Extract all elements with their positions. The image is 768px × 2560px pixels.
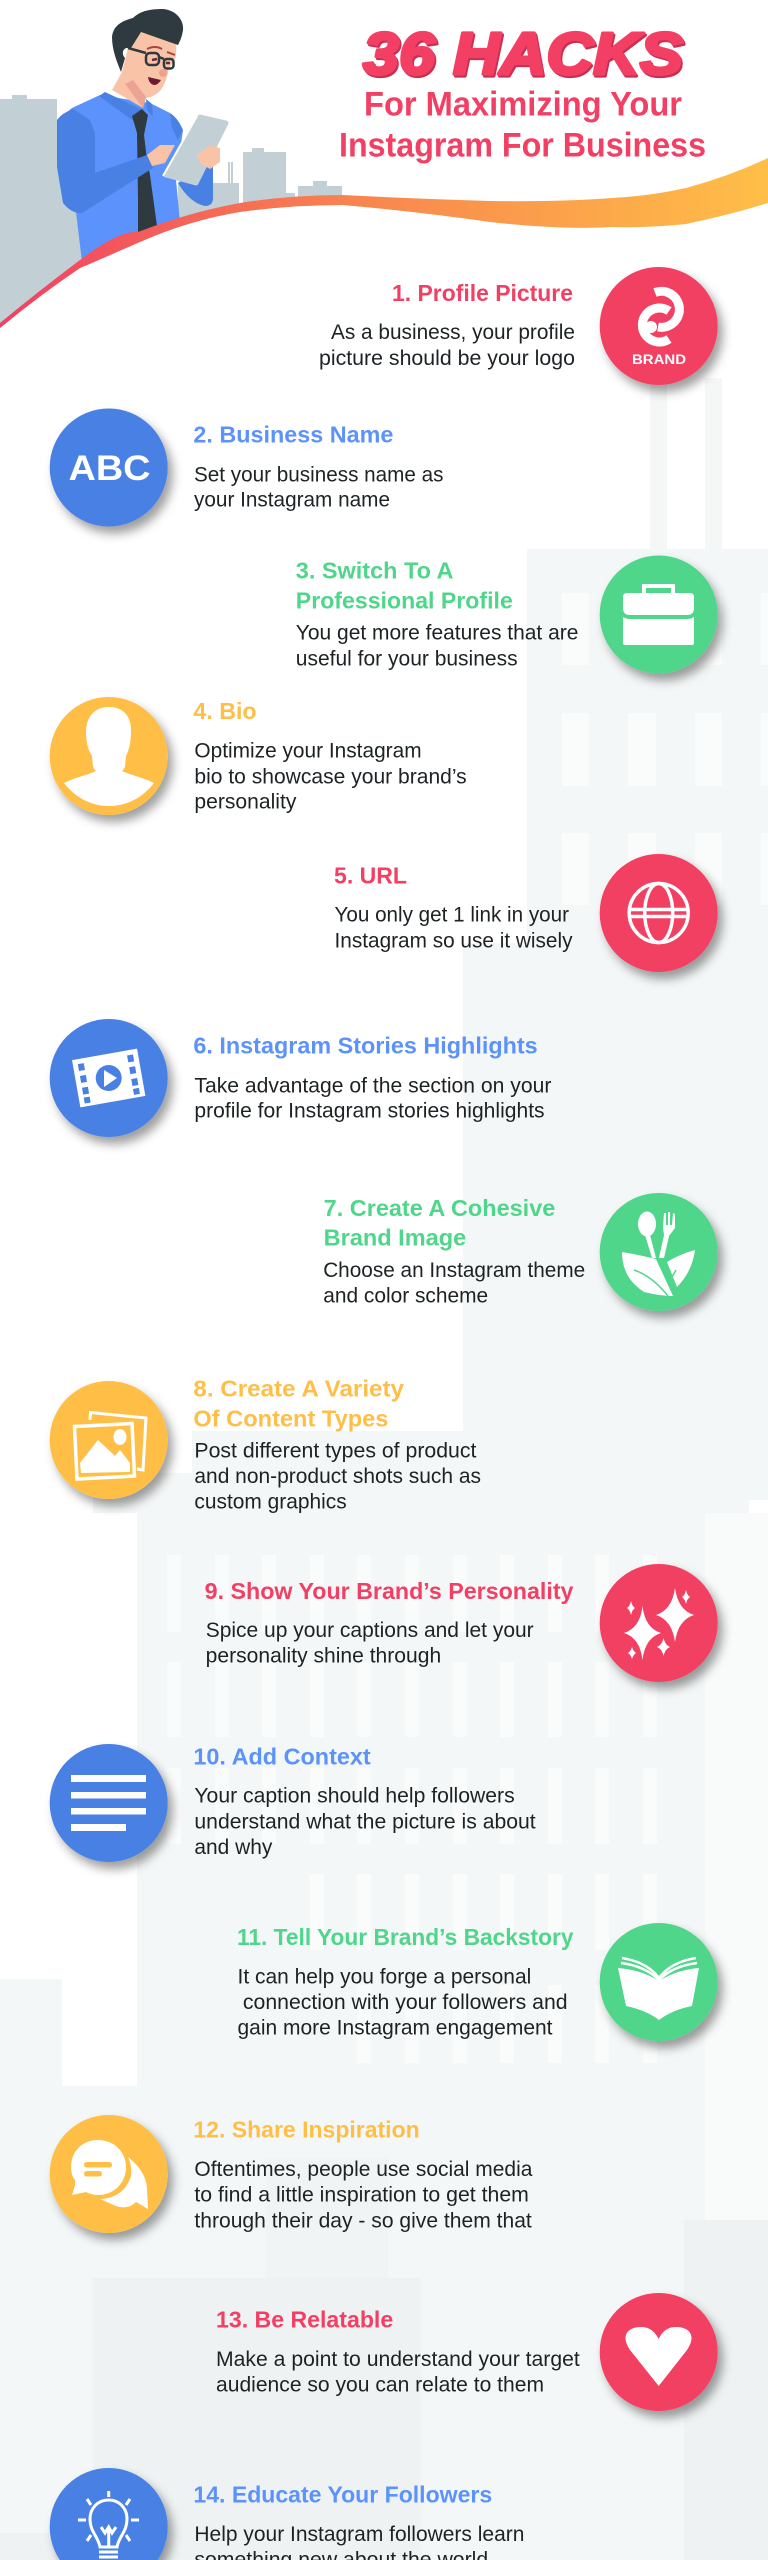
body: personality shine through	[206, 1645, 441, 1668]
body: picture should be your logo	[319, 347, 575, 370]
hack 1: profile picture	[319, 267, 718, 385]
body: profile for Instagram stories highlights	[194, 1100, 545, 1123]
body: Instagram so use it wisely	[334, 929, 573, 952]
heading: Of Content Types	[193, 1406, 388, 1432]
hack 6: stories highlights	[50, 1019, 551, 1137]
body: Make a point to understand your target	[216, 2348, 580, 2371]
body	[323, 1259, 585, 1308]
body: connection with your followers and	[243, 1991, 568, 2014]
left sleeve	[57, 109, 153, 213]
icon: text lines	[50, 1744, 168, 1862]
hack 7: cohesive brand image	[323, 1193, 718, 1311]
white area below wave	[0, 203, 768, 378]
subtitle	[339, 86, 706, 164]
subtitle: Instagram For Business	[339, 126, 706, 164]
body	[206, 1619, 534, 1668]
36 HACKS: 36 HACKS	[363, 21, 683, 87]
icon: film strip	[50, 1019, 168, 1137]
body: bio to showcase your brand’s	[194, 765, 467, 788]
body: As a business, your profile	[331, 321, 575, 344]
heading	[324, 1195, 555, 1251]
title	[339, 21, 706, 164]
eyebrows	[147, 47, 175, 55]
heading: 8. Create A Variety	[193, 1376, 404, 1402]
body: to find a little inspiration to get them	[194, 2184, 529, 2207]
body	[334, 904, 573, 952]
heading: 14. Educate Your Followers	[193, 2481, 492, 2507]
back arm	[170, 113, 213, 206]
body	[238, 1965, 568, 2040]
hack 2: business name	[50, 408, 443, 526]
hands	[147, 145, 220, 169]
body	[194, 1074, 551, 1123]
heading: Brand Image	[324, 1225, 466, 1251]
body: It can help you forge a personal	[238, 1965, 531, 1988]
body: Set your business name as	[194, 463, 444, 486]
hack 12: share inspiration	[50, 2115, 533, 2233]
body: useful for your business	[296, 647, 518, 670]
heading: 2. Business Name	[193, 422, 393, 448]
tablet rim	[163, 116, 197, 176]
body	[194, 1785, 536, 1859]
icon: open book	[600, 1923, 718, 2041]
body: Spice up your captions and let your	[206, 1619, 534, 1642]
hair	[112, 9, 183, 72]
heading: 13. Be Relatable	[216, 2307, 393, 2333]
glasses	[128, 48, 174, 68]
hack 9: brand personality	[205, 1564, 718, 1682]
heading: 11. Tell Your Brand’s Backstory	[237, 1924, 574, 1950]
body	[194, 1439, 481, 1514]
heading: 1. Profile Picture	[392, 280, 573, 306]
icon: brand logo: BRAND	[632, 351, 686, 367]
cheek	[159, 69, 167, 77]
icon: heart	[600, 2293, 718, 2411]
icon: chat bubbles	[50, 2115, 168, 2233]
heading: 7. Create A Cohesive	[324, 1195, 555, 1221]
body: audience so you can relate to them	[216, 2374, 544, 2397]
tie	[132, 109, 157, 232]
collar	[99, 92, 153, 120]
heading: 10. Add Context	[193, 1743, 371, 1769]
heading: Professional Profile	[296, 587, 513, 613]
body: and non-product shots such as	[194, 1465, 481, 1488]
shirt body	[58, 95, 183, 262]
hack 5: URL	[334, 854, 718, 972]
icon: light bulb	[50, 2468, 168, 2560]
icon: brand logo	[600, 267, 718, 385]
body: custom graphics	[194, 1491, 347, 1514]
icon: globe	[600, 854, 718, 972]
body: personality	[194, 791, 297, 814]
heading: 12. Share Inspiration	[193, 2117, 420, 2143]
hack 10: add context	[50, 1743, 536, 1862]
hack 4: bio	[50, 697, 467, 815]
header skyline buildings	[0, 95, 342, 330]
body	[319, 321, 575, 370]
body	[194, 739, 467, 814]
body: and color scheme	[323, 1285, 488, 1308]
heading: 9. Show Your Brand’s Personality	[205, 1578, 574, 1604]
body	[296, 621, 578, 670]
hack 14: educate followers	[50, 2468, 524, 2560]
body: Optimize your Instagram	[194, 739, 422, 762]
eyes	[152, 59, 170, 63]
icon: person silhouette	[50, 697, 168, 815]
hack 8: variety of content types	[50, 1376, 481, 1514]
36 HACKS: 36 HACKS	[364, 23, 684, 89]
body: Post different types of product	[194, 1439, 477, 1462]
icon: leaves with spoon and fork	[600, 1193, 718, 1311]
body: your Instagram name	[194, 489, 390, 512]
body: Oftentimes, people use social media	[194, 2158, 533, 2181]
icon: briefcase	[600, 556, 718, 674]
icon: ABC: ABC	[68, 449, 150, 488]
tablet	[166, 117, 226, 183]
subtitle: For Maximizing Your	[364, 86, 682, 124]
body	[194, 2158, 533, 2232]
body: understand what the picture is about	[194, 1810, 536, 1833]
body: through their day - so give them that	[194, 2209, 532, 2232]
body: You get more features that are	[296, 621, 578, 644]
heading: 4. Bio	[193, 698, 257, 724]
hack 13: be relatable	[216, 2293, 718, 2411]
gradient wave ribbon	[0, 158, 768, 328]
body: You only get 1 link in your	[334, 904, 569, 927]
body: Take advantage of the section on your	[194, 1074, 551, 1097]
body: Choose an Instagram theme	[323, 1259, 585, 1282]
body	[194, 2523, 524, 2560]
body: Help your Instagram followers learn	[194, 2523, 524, 2546]
body: gain more Instagram engagement	[238, 2017, 553, 2040]
icon: ABC	[50, 408, 168, 526]
heading: 6. Instagram Stories Highlights	[193, 1032, 538, 1058]
heading	[296, 558, 513, 613]
mouth	[148, 77, 161, 85]
hack 11: backstory	[237, 1923, 718, 2041]
body: Your caption should help followers	[194, 1785, 515, 1808]
icon: sparkles	[600, 1564, 718, 1682]
heading: 3. Switch To A	[296, 558, 454, 584]
hack 3: professional profile	[296, 556, 718, 674]
neck and face	[112, 32, 176, 108]
body	[216, 2348, 580, 2397]
body	[194, 463, 444, 512]
neck shade	[125, 80, 146, 108]
heading	[193, 1376, 404, 1432]
heading: 5. URL	[334, 862, 407, 888]
body: and why	[194, 1836, 273, 1859]
icon: photos	[50, 1381, 168, 1499]
illustration: businessman with tablet	[57, 9, 226, 262]
